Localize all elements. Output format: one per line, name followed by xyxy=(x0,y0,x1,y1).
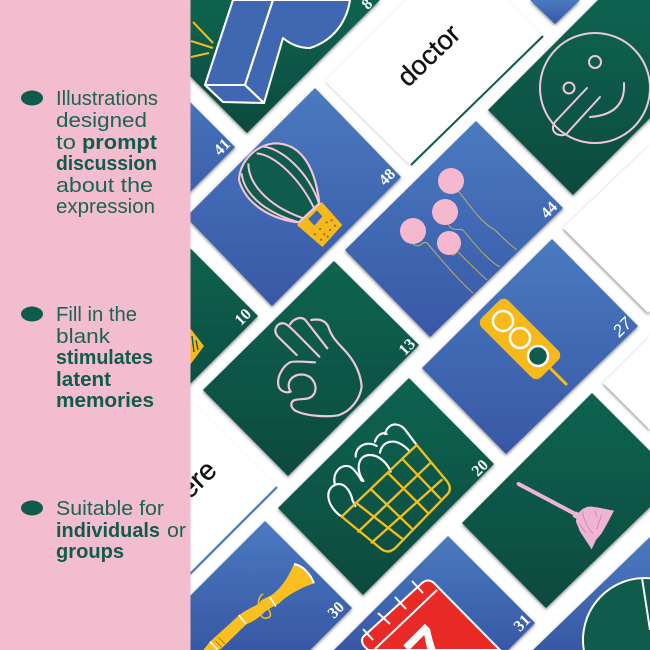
icon: yellow rays xyxy=(191,22,213,57)
bullet 3 xyxy=(21,500,43,516)
card 20: basket xyxy=(278,378,494,595)
word: doctor: doctor xyxy=(391,19,466,92)
text block 2: stimulates xyxy=(56,347,153,369)
card: broom xyxy=(462,393,650,608)
text block 3 xyxy=(56,498,186,563)
icon: traffic light xyxy=(477,296,567,385)
card edge stripe xyxy=(411,36,543,165)
icon: yellow basket piece xyxy=(190,328,204,365)
number 31: 31 xyxy=(511,612,534,635)
card 27: traffic light xyxy=(422,239,638,454)
text block 2: latent xyxy=(56,369,111,391)
text block 2: Fill in the xyxy=(56,304,137,326)
card: here xyxy=(60,400,277,574)
text block 3: Suitable for xyxy=(56,498,164,520)
icon: pie chart xyxy=(583,578,650,650)
text block 1: discussion xyxy=(56,153,157,175)
card 10 xyxy=(60,228,258,424)
icon: blue block shape xyxy=(205,0,350,103)
number 41: 41 xyxy=(211,136,234,159)
text block 2: blank xyxy=(56,326,111,348)
card 41 xyxy=(60,62,235,237)
card: pie chart xyxy=(533,537,650,650)
card: blank white lower right xyxy=(603,336,650,430)
card: small blue top xyxy=(530,0,580,24)
icon: ok hand xyxy=(275,318,362,416)
word: here: here xyxy=(161,454,222,515)
icon: rifle xyxy=(203,564,314,650)
text block 1: prompt xyxy=(82,132,157,154)
number 48: 48 xyxy=(376,166,399,189)
text block 1: expression xyxy=(56,196,155,218)
icon: leaves xyxy=(328,424,417,517)
text block 2 xyxy=(56,304,154,412)
card edge stripe xyxy=(190,487,277,574)
icon: balloon strings xyxy=(413,192,517,293)
icon: calendar xyxy=(362,580,500,650)
card 13: hand xyxy=(203,261,419,476)
card 8: whistle xyxy=(114,0,380,133)
number 44: 44 xyxy=(538,199,561,222)
number 30: 30 xyxy=(325,599,348,622)
number 27: 27 xyxy=(608,314,636,341)
text block 1 xyxy=(56,88,158,218)
text block 3: individuals xyxy=(56,520,160,542)
icon: basket grid xyxy=(342,445,450,551)
text block 1: Illustrations xyxy=(56,88,158,110)
number 20: 20 xyxy=(469,457,492,480)
number 10: 10 xyxy=(232,306,255,329)
card 31: calendar xyxy=(334,536,535,650)
card 48: hot air balloon xyxy=(186,88,401,306)
card 44: balloons xyxy=(345,121,563,337)
bullet 2 xyxy=(21,306,43,322)
icon: broom xyxy=(519,484,614,549)
text block 3: or xyxy=(167,520,186,542)
card: blank white right xyxy=(563,145,650,313)
text block 1: designed xyxy=(56,110,147,132)
card 30: rifle xyxy=(136,521,352,650)
text block 1: to xyxy=(56,132,76,154)
icon: pink balloons xyxy=(400,168,464,255)
bullet 1 xyxy=(21,90,43,106)
text block 3: groups xyxy=(56,541,124,563)
text block 2: memories xyxy=(56,390,154,412)
panel: pink sidebar xyxy=(0,0,190,650)
card: doctor xyxy=(325,0,543,165)
icon: face with tongue xyxy=(540,33,650,143)
text block 1: about the xyxy=(56,175,153,197)
number 13: 13 xyxy=(396,336,419,359)
card: smiley xyxy=(488,0,650,195)
icon: balloon xyxy=(239,143,341,246)
